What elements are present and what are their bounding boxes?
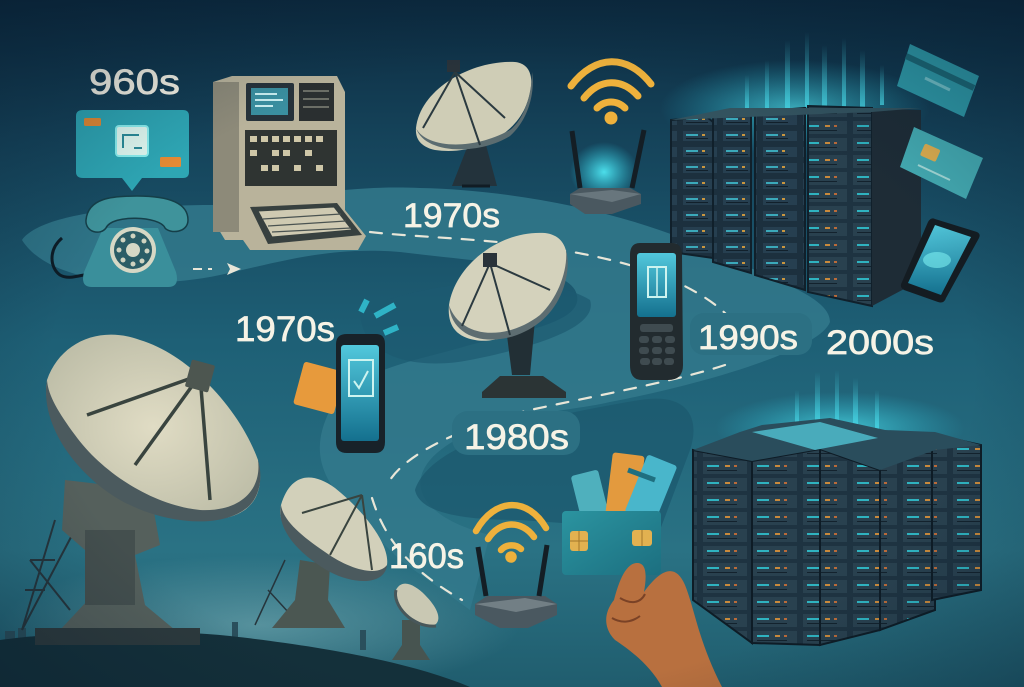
icon: wifi router bottom [475, 545, 557, 628]
horizon haze [0, 555, 520, 687]
top-right server glow [660, 32, 930, 156]
speech bubble card [76, 110, 189, 191]
icon: smartphone top right [901, 218, 980, 302]
icon: medium satellite dish [255, 478, 387, 628]
icon: smartphone with check [293, 300, 398, 453]
icon: top satellite dish [416, 60, 533, 186]
icon: small satellite dish [392, 584, 438, 660]
distant skyline [5, 622, 366, 650]
label: 1980s: 1980s [464, 418, 569, 457]
icon: wifi symbol top [571, 62, 651, 121]
icon: candybar phone [630, 243, 683, 380]
label: 1970s middle: 1970s [235, 310, 335, 349]
winding path ribbon [22, 188, 830, 610]
label: 1990s [690, 313, 812, 357]
bottom-right server glow [715, 370, 965, 464]
icon: floating card top [897, 44, 979, 117]
label: 160s: 160s [389, 537, 464, 576]
icon: vintage computer terminal [213, 76, 366, 250]
panel: bottom server cluster [693, 418, 981, 645]
label: 960s: 960s [89, 63, 180, 102]
foreground hill [0, 632, 470, 687]
first short arrow [193, 263, 241, 275]
label: 1990s: 1990s [698, 319, 798, 357]
dashed timeline route [370, 232, 745, 600]
label: 1980s [452, 411, 580, 457]
label: 2000s: 2000s [826, 324, 934, 362]
panel: top server racks [671, 106, 921, 306]
icon: rotary telephone [52, 196, 188, 287]
icon: large satellite dish [22, 335, 260, 645]
icon: fanned payment cards [571, 452, 677, 530]
icon: floating card chip [900, 127, 983, 199]
label: 1970s top: 1970s [403, 197, 500, 235]
icon: hand holding chip card [562, 511, 722, 687]
icon: middle satellite dish [449, 233, 568, 398]
icon: wifi router top [570, 130, 644, 214]
icon: wifi symbol bottom [476, 505, 546, 560]
